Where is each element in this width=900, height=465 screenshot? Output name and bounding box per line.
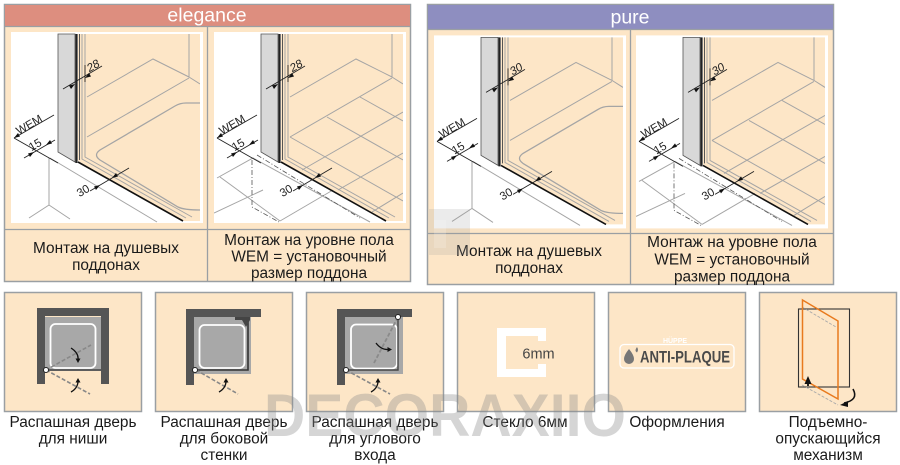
icon: lifting door bbox=[798, 300, 855, 407]
logo: anti-plaque: HÜPPE bbox=[663, 336, 687, 345]
diagram: installation on shower tray: 15 bbox=[27, 137, 44, 154]
caption: floor-level installation: размер поддона bbox=[251, 265, 367, 282]
caption: shower tray installation: Монтаж на душевых bbox=[33, 240, 179, 257]
feature: 6mm glass bbox=[458, 292, 594, 431]
caption: Оформления bbox=[629, 414, 725, 431]
caption: floor-level installation: WEM = установочный bbox=[231, 248, 387, 266]
caption: shower tray installation: Монтаж на душевых bbox=[456, 243, 602, 260]
heading: elegance: elegance bbox=[167, 4, 247, 26]
caption: Подъемно- bbox=[789, 414, 867, 431]
panel: pure bbox=[428, 4, 834, 286]
diagram: installation on shower tray: 30 bbox=[508, 61, 526, 78]
diagram: installation on shower tray: 30 bbox=[75, 183, 92, 200]
diagram: floor-level installation: 30 bbox=[278, 183, 295, 200]
caption: для ниши bbox=[39, 430, 107, 448]
caption: стенки bbox=[201, 447, 247, 464]
caption: floor-level installation: Монтаж на уровне пола bbox=[224, 232, 394, 249]
diagram: floor-level installation: 28 bbox=[287, 58, 306, 75]
panel: elegance bbox=[4, 4, 410, 282]
watermark: DECORAXIIO: DECORAXIIO bbox=[264, 382, 626, 449]
diagram: installation on shower tray: 15 bbox=[450, 140, 467, 157]
diagram: floor-level installation: 15 bbox=[230, 137, 247, 154]
icon: corner entry door bbox=[337, 309, 412, 394]
feature: hinged door for side wall bbox=[156, 292, 292, 464]
caption: опускающийся bbox=[775, 430, 881, 448]
caption: Стекло 6мм bbox=[482, 414, 568, 431]
caption: floor-level installation: Монтаж на уровне пола bbox=[647, 234, 817, 251]
diagram: installation on shower tray bbox=[434, 35, 626, 228]
diagram: floor-level installation: WEM bbox=[639, 117, 670, 141]
feature: hinged door for corner entry bbox=[306, 292, 444, 464]
caption: для углового bbox=[329, 430, 421, 448]
feature: lift-and-lower mechanism bbox=[760, 292, 896, 464]
heading: elegance bbox=[5, 4, 410, 26]
diagram: installation on shower tray: WEM bbox=[14, 113, 45, 138]
icon: niche door bbox=[37, 308, 109, 394]
icon: side wall door bbox=[186, 309, 261, 394]
diagram: floor-level installation: 30 bbox=[710, 61, 728, 78]
diagram: installation on shower tray: WEM bbox=[437, 117, 468, 141]
watermark: small logo square bbox=[429, 209, 470, 255]
diagram: installation on shower tray bbox=[11, 32, 203, 223]
caption: Распашная дверь bbox=[311, 414, 439, 431]
caption: для боковой bbox=[180, 430, 268, 448]
caption: Распашная дверь bbox=[9, 414, 137, 431]
icon: 6mm glass profile: 6mm bbox=[522, 346, 555, 362]
heading: pure bbox=[428, 5, 833, 29]
diagram: floor-level installation bbox=[214, 32, 406, 223]
diagram: floor-level installation: WEM bbox=[217, 113, 248, 138]
caption: Распашная дверь bbox=[160, 414, 288, 431]
caption: shower tray installation: поддонах bbox=[72, 257, 140, 274]
caption: механизм bbox=[793, 447, 863, 464]
feature: hinged door for niche bbox=[4, 292, 142, 448]
caption: floor-level installation: размер поддона bbox=[674, 268, 790, 286]
logo: anti-plaque: ANTI-PLAQUE bbox=[640, 348, 730, 366]
diagram: installation on shower tray: 30 bbox=[498, 186, 515, 203]
feature: anti-plaque finish bbox=[608, 292, 746, 431]
diagram: floor-level installation bbox=[636, 35, 828, 228]
logo: anti-plaque bbox=[620, 336, 734, 368]
diagram: installation on shower tray: 28 bbox=[84, 58, 103, 75]
diagram: floor-level installation: 15 bbox=[652, 140, 669, 157]
caption: floor-level installation: WEM = установочный bbox=[654, 252, 810, 268]
caption: входа bbox=[354, 447, 396, 464]
diagram: floor-level installation: 30 bbox=[700, 186, 717, 203]
heading: pure: pure bbox=[610, 6, 650, 28]
caption: shower tray installation: поддонах bbox=[495, 260, 563, 277]
